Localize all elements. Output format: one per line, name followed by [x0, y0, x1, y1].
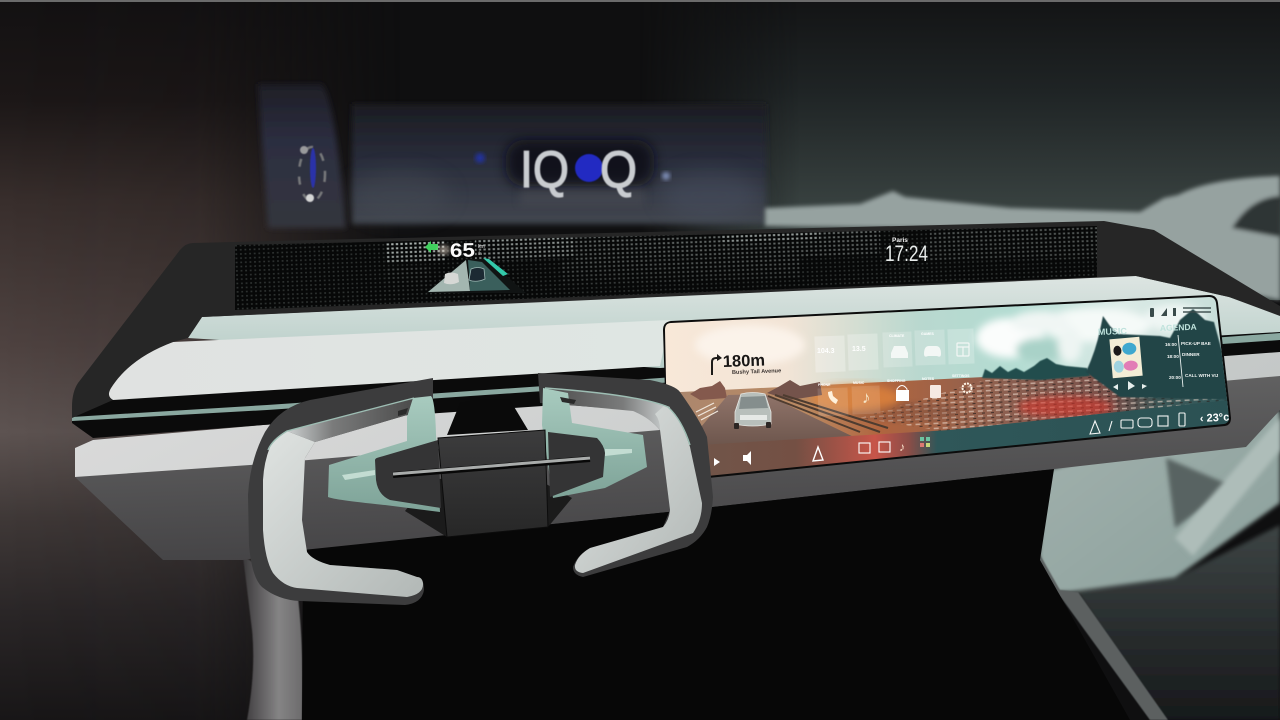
icon: calendar right — [1158, 416, 1168, 426]
icon: speaker — [743, 451, 751, 465]
white front dash — [75, 350, 1280, 477]
icon: gamepad — [1138, 418, 1152, 427]
music title: MUSIC — [1098, 326, 1128, 337]
console leg — [1039, 553, 1168, 720]
icon: gear — [962, 384, 972, 392]
logo text: IQ — [520, 141, 569, 199]
head-up display: km — [478, 244, 485, 250]
blurred side display panel — [258, 84, 346, 228]
icon: car tile — [891, 346, 908, 358]
dashboard visor — [72, 221, 1280, 418]
right grip — [575, 405, 702, 573]
tile labels: SHOPPING — [887, 379, 906, 383]
icon: list — [930, 385, 941, 398]
upper dash surface — [188, 276, 1280, 368]
blurred rear display panel with logo: Q — [600, 141, 637, 199]
agenda line — [1178, 335, 1183, 387]
pebble field — [860, 372, 1229, 432]
icon: bag — [896, 386, 909, 401]
temperature: ‹ 23°c — [1200, 411, 1230, 425]
road stripes — [768, 395, 888, 432]
icon: nav right — [1090, 421, 1100, 434]
infotainment screen — [660, 290, 1240, 482]
left mint highlight — [342, 470, 375, 480]
black under-dash — [302, 469, 1130, 720]
icon: nav triangle — [813, 447, 823, 461]
head-up display — [235, 224, 1097, 310]
icon: note right — [1109, 421, 1112, 431]
hud clock: 17:24 — [885, 241, 928, 266]
front lip — [109, 320, 670, 400]
bottom icons left — [714, 440, 905, 466]
treeline — [982, 358, 1090, 380]
tile labels: MUSIC — [853, 381, 865, 385]
ground — [680, 366, 1229, 436]
right wing — [548, 432, 605, 497]
bottom strip — [708, 400, 1229, 476]
icon: bag small — [859, 443, 870, 453]
right mint highlight — [605, 449, 632, 456]
blurred rear display panel with logo — [350, 104, 766, 224]
red glow — [1017, 396, 1113, 418]
range tile: 13.5 — [852, 346, 866, 353]
agenda items: CALL WITH VIJ — [1185, 373, 1219, 378]
agenda items: 16:00 — [1165, 342, 1177, 347]
icon: app grid — [920, 437, 930, 447]
left road stripes — [696, 403, 718, 420]
left wing — [375, 440, 441, 508]
infotainment screen frame — [663, 295, 1231, 482]
hud city: Paris — [892, 237, 908, 244]
icon: play — [714, 458, 720, 466]
album cover — [1109, 337, 1143, 378]
silver bar — [393, 458, 590, 475]
road — [702, 394, 852, 444]
right mint spoke — [542, 388, 647, 498]
left upper band — [287, 398, 414, 442]
player controls — [1113, 381, 1147, 390]
hud speed: 65 — [450, 240, 475, 262]
logo blue dot — [575, 154, 603, 182]
right slit — [560, 397, 576, 404]
tile labels: NOTES — [922, 377, 935, 381]
agenda items: PICK-UP BAE — [1181, 341, 1211, 346]
agenda title: AGENDA — [1160, 322, 1197, 333]
floor right — [1075, 525, 1280, 720]
clouds — [695, 304, 1205, 365]
head-up display: /h — [478, 251, 482, 256]
agenda items — [1165, 341, 1219, 380]
icon: phone — [828, 391, 838, 404]
left teal edge — [268, 398, 414, 450]
hud road — [426, 258, 526, 293]
center block — [438, 430, 548, 537]
icon: note: ♪ — [862, 388, 870, 407]
tile labels: PHONE — [818, 383, 831, 387]
hood — [447, 399, 528, 435]
right teal edge — [545, 388, 690, 445]
left support leg — [243, 556, 302, 720]
dark mountains — [1086, 309, 1235, 400]
steering yoke — [248, 373, 713, 605]
distance: 180m — [723, 352, 765, 371]
lower dash grey body — [75, 372, 1280, 560]
icon: phone right — [1179, 413, 1185, 426]
black trim band — [72, 322, 1280, 438]
left mountains — [690, 381, 727, 400]
hud car silver — [444, 272, 459, 284]
orange glow — [810, 384, 900, 412]
hud arrow — [425, 241, 438, 253]
tile labels: GAMES — [921, 332, 934, 336]
sky — [660, 290, 1235, 410]
icon: note small: ♪ — [899, 440, 905, 454]
hud car dark — [469, 268, 485, 281]
rear passenger seat outline — [765, 176, 1280, 300]
hud light bands — [385, 227, 1097, 285]
agenda items: DINNER — [1182, 352, 1200, 357]
app tiles — [814, 329, 975, 417]
passenger arm — [1175, 417, 1280, 556]
icon: calendar small — [879, 442, 890, 452]
car — [734, 392, 771, 429]
left grip — [263, 431, 423, 597]
tile labels: CLIMATE — [889, 334, 905, 338]
icon: game tile — [924, 346, 941, 357]
tile labels: SETTINGS — [952, 374, 970, 378]
tile labels — [818, 332, 970, 387]
left mint spoke — [328, 396, 440, 512]
hub lower shadow — [405, 470, 572, 537]
agenda items: 20:00 — [1169, 375, 1181, 380]
status icons — [1150, 307, 1211, 317]
icon: media — [1121, 420, 1133, 428]
icon: calendar tile — [957, 343, 969, 356]
passenger console — [1039, 410, 1280, 720]
bottom icons right — [1090, 413, 1185, 434]
right outer frame — [538, 373, 713, 577]
left outer frame — [248, 378, 433, 605]
left slit — [398, 408, 408, 416]
agenda items: 18:00 — [1167, 354, 1179, 359]
street: Bushy Tail Avenue — [732, 368, 781, 376]
radio tile: 104.3 — [817, 348, 835, 355]
right upper band — [545, 388, 670, 430]
turn arrow — [712, 358, 718, 375]
